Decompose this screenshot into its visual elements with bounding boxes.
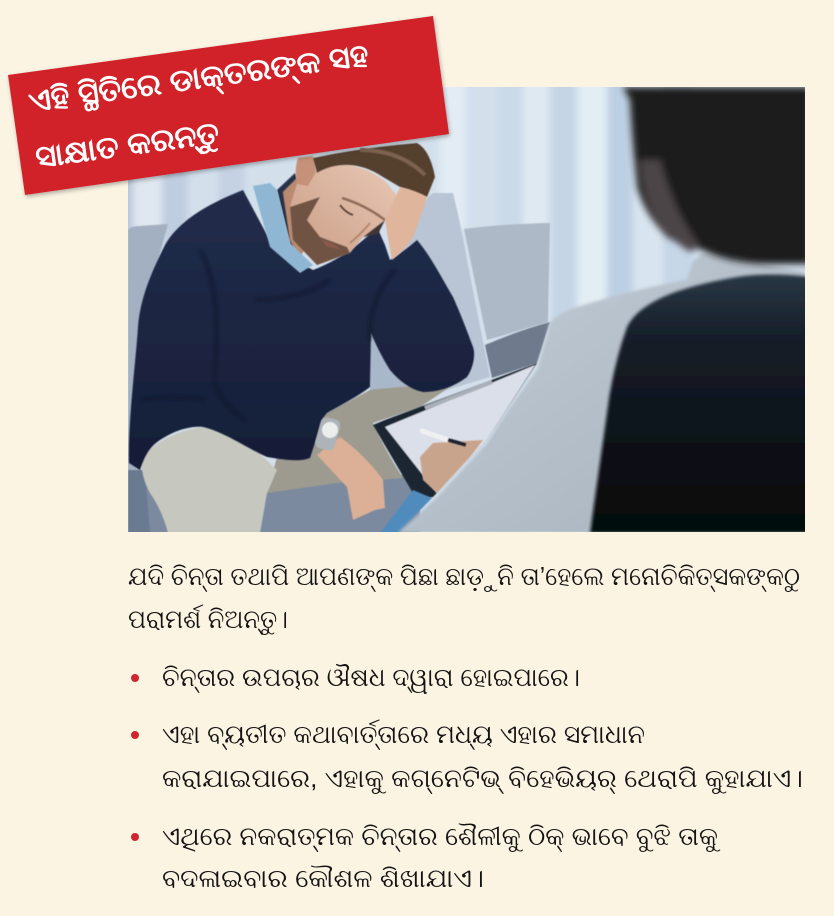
intro paragraph: ଯଦି ଚିନ୍ତା ତଥାପି ଆପଣଙ୍କ ପିଛା ଛାଡ଼ୁନି ତା’ହେଲେ ମନୋଚିକିତ୍ସକଙ୍କଠୁ [128,561,800,592]
bullet 3 [131,821,721,893]
clipboard [373,363,537,500]
intro paragraph: ପରାମର୍ଶ ନିଅନ୍ତୁ। [128,604,288,635]
bullet 2: କରାଯାଇପାରେ, ଏହାକୁ କଗ୍ନେଟିଭ୍ ବିହେଭିୟର୍ ଥେରାପି କୁହାଯାଏ। [162,763,803,794]
bullet 3: ଏଥିରେ ନକରାତ୍ମକ ଚିନ୍ତାର ଶୈଳୀକୁ ଠିକ୍ ଭାବେ ବୁଝି ତାକୁ [162,821,721,852]
bullet 2: ଏହା ବ୍ୟତୀତ କଥାବାର୍ତ୍ତାରେ ମଧ୍ୟ ଏହାର ସମାଧାନ [162,719,645,750]
banner: red rotated heading [8,16,449,195]
bullet 1: ଚିନ୍ତାର ଉପଚାର ଔଷଧ ଦ୍ୱାରା ହୋଇପାରେ। [162,662,580,693]
heading line 2: ସାକ୍ଷାତ କରନ୍ତୁ [33,115,222,178]
intro paragraph [128,561,800,635]
man: sweater [129,190,474,470]
bullet 3: ବଦଳାଇବାର କୌଶଳ ଶିଖାଯାଏ। [162,863,484,893]
therapist: hair [623,87,810,264]
man: shirt collar [253,183,313,273]
therapist: shirt [398,253,805,533]
therapist: blue sleeve [380,490,432,533]
therapist: hand and pen [420,431,483,493]
heading line 1: ଏହି ସ୍ଥିତିରେ ଡାକ୍ତରଙ୍କ ସହ [26,37,371,122]
therapist: chair back [590,274,810,533]
sofa [128,193,550,533]
man: trousers [142,385,453,533]
photo: man talking to a therapist [120,80,820,540]
man: sweater folds [140,250,395,420]
bullet 2 [131,719,803,794]
man: neck and dark collar [276,172,304,255]
man: lowered hand and watch [314,416,385,520]
wall with striped curtains [120,80,820,540]
man: head [290,143,435,265]
man: raised hand [385,187,427,260]
